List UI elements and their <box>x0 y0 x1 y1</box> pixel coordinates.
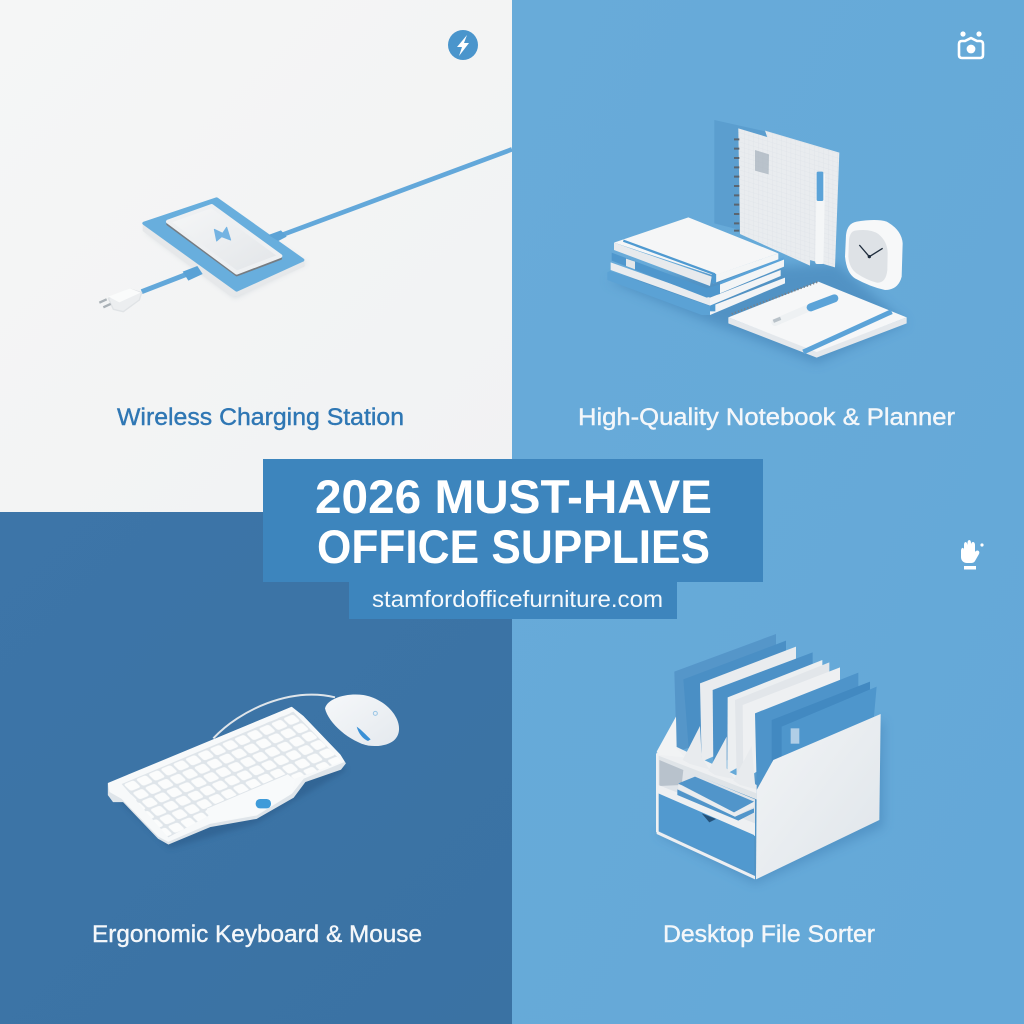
mouse cable <box>213 695 335 738</box>
stacked notebooks <box>607 217 785 315</box>
panel: wireless charging station <box>0 0 512 512</box>
standing spiral notebook <box>714 120 839 267</box>
label: wireless charging station: Wireless Charging Station <box>117 404 404 431</box>
charging pad <box>143 199 304 295</box>
website tab <box>349 582 677 619</box>
printed grid mark <box>755 150 769 174</box>
icon: lightning bolt <box>448 30 478 60</box>
smartphone <box>168 206 280 275</box>
label: desktop file sorter: Desktop File Sorter <box>663 921 875 948</box>
upright folders <box>674 634 877 785</box>
panel: ergonomic keyboard and mouse <box>0 512 512 1024</box>
website tab: stamfordofficefurniture.com <box>372 586 663 612</box>
pen on notepad <box>773 298 834 322</box>
dividers and top shelf <box>657 717 757 799</box>
icon: raised hand <box>961 540 984 570</box>
organizer frame edges <box>656 753 755 879</box>
blue drawer front <box>658 793 754 874</box>
bottom book <box>607 271 712 315</box>
title line one: 2026 MUST-HAVE <box>315 470 712 523</box>
notebook and planner illustration <box>607 120 907 363</box>
icon: camera home <box>959 31 983 58</box>
flat notepad with pen <box>728 282 907 358</box>
charging station illustration <box>99 149 512 312</box>
file sorter illustration <box>656 634 883 883</box>
third book <box>611 262 710 306</box>
top book <box>614 243 712 286</box>
panel: notebook and planner <box>512 0 1024 1024</box>
left cable and plug <box>99 266 203 312</box>
label: notebook and planner: High-Quality Notebook & Planner <box>578 404 955 431</box>
keyboard <box>108 707 345 844</box>
power cable to the right <box>280 149 512 236</box>
key grid <box>122 712 342 837</box>
palm rest with blue button <box>207 774 295 823</box>
mouse <box>325 694 399 746</box>
spiral binding <box>734 139 739 231</box>
second book <box>612 253 720 298</box>
desk clock <box>845 220 903 290</box>
organizer side panel <box>756 714 881 879</box>
title line two: OFFICE SUPPLIES <box>317 520 710 573</box>
title banner <box>263 459 763 619</box>
cubby with stored books <box>658 759 755 836</box>
keyboard and mouse illustration <box>108 694 399 848</box>
label: ergonomic keyboard and mouse: Ergonomic Keyboard & Mouse <box>92 921 422 948</box>
clipped pen <box>815 172 825 264</box>
